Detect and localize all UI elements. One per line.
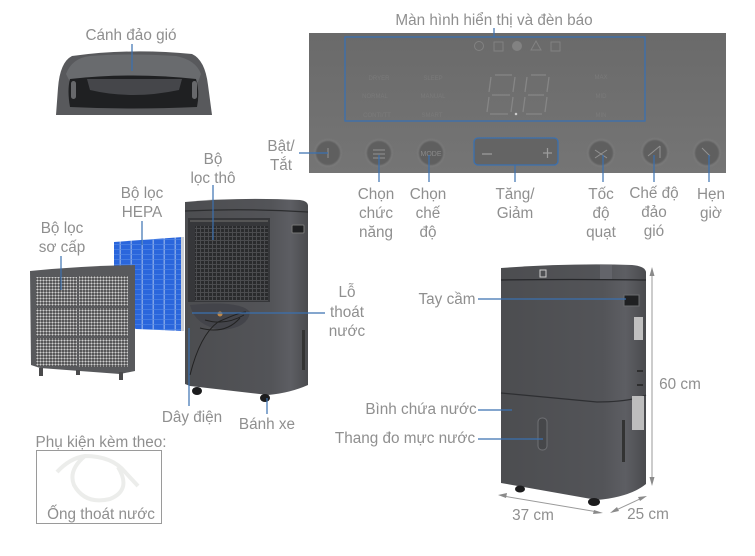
label: drain hole: nước (329, 323, 366, 340)
label: swing mode: Chế độ (629, 185, 679, 202)
panel: control panel: MODE (420, 151, 442, 158)
icon: primary filter (30, 265, 135, 380)
label: HEPA: HEPA (122, 204, 163, 221)
mode labels: MANUAL (420, 94, 446, 100)
label: swing mode: gió (644, 223, 664, 240)
label: power (267, 138, 328, 174)
label: drain hole (192, 284, 366, 340)
icon: HEPA filter (114, 237, 184, 331)
dimension: depth (610, 496, 669, 523)
accessory box: drain hose: Ống thoát nước (47, 505, 155, 523)
status icons (474, 41, 560, 51)
label: primary filter: sơ cấp (39, 239, 85, 256)
label: function: chức (359, 205, 393, 222)
dimension: width: 37 cm (512, 507, 554, 524)
mode labels: NORMAL (362, 94, 388, 100)
mode labels: SMART (422, 113, 443, 119)
label: timer (697, 155, 725, 222)
label: plus minus: Giảm (497, 205, 533, 222)
label: HEPA: Bộ lọc (121, 185, 164, 202)
mode labels (362, 75, 608, 119)
dimension: height (650, 267, 701, 486)
label: power cord (162, 328, 222, 426)
label: wheel (239, 398, 295, 433)
display highlight box (345, 37, 645, 121)
panel: control panel (309, 33, 726, 173)
mode labels: DRYER (369, 76, 390, 82)
dimension: depth: 25 cm (627, 506, 669, 523)
icon: top air vent flap (56, 51, 212, 115)
label: air flap (85, 27, 177, 71)
label: mode: chế (416, 205, 441, 222)
increase / decrease control (474, 138, 558, 165)
label: swing mode: đảo (641, 204, 667, 221)
mode labels: MID (596, 94, 607, 100)
label: timer: Hẹn (697, 186, 725, 203)
seven-segment digits (487, 75, 549, 115)
label: fan speed (586, 155, 617, 241)
mode labels: SLEEP (423, 76, 443, 82)
label: mode: độ (419, 224, 437, 241)
mode labels: CONTI/TT (363, 113, 391, 119)
label: timer: giờ (700, 205, 722, 222)
label: primary filter: Bộ lọc (41, 220, 84, 237)
label: power: Bật/ (267, 138, 295, 155)
accessories heading: Phụ kiện kèm theo: (36, 434, 166, 451)
label: function: Chọn (358, 186, 394, 203)
label: coarse filter: lọc thô (190, 170, 236, 187)
label: primary filter (39, 220, 85, 290)
mode labels: MAX (594, 75, 608, 81)
label: drain hole: thoát (330, 304, 365, 321)
label: display: Màn hình hiển thị và đèn báo (395, 12, 593, 29)
label: fan speed: độ (592, 205, 610, 222)
label: water level: Thang đo mực nước (335, 430, 475, 447)
label: wheel: Bánh xe (239, 416, 295, 433)
label: coarse filter (190, 151, 236, 240)
label: air flap: Cánh đảo gió (85, 27, 177, 44)
label: function: năng (359, 224, 393, 241)
label: power: Tắt (270, 157, 293, 174)
mode labels: MIN (596, 113, 606, 119)
accessory box: drain hose (36, 450, 162, 524)
label: fan speed: Tốc (588, 186, 614, 203)
dimension: width (498, 493, 603, 524)
icon: dehumidifier rear view (185, 199, 308, 402)
buttons (315, 139, 720, 166)
icon: dehumidifier front view (501, 264, 646, 506)
label: drain hole: Lỗ (338, 284, 356, 301)
label: fan speed: quạt (586, 224, 617, 241)
label: plus minus (495, 165, 535, 222)
label: coarse filter: Bộ (204, 151, 222, 168)
label: mode (410, 155, 446, 241)
label: power cord: Dây điện (162, 409, 222, 426)
label: handle: Tay cầm (419, 291, 475, 308)
label: mode: Chọn (410, 186, 446, 203)
label: plus minus: Tăng/ (495, 186, 535, 203)
label: HEPA (121, 185, 164, 245)
label: function (358, 155, 394, 241)
label: swing mode (629, 155, 679, 240)
label: water tank: Bình chứa nước (365, 401, 477, 418)
dimension: height: 60 cm (659, 376, 701, 393)
